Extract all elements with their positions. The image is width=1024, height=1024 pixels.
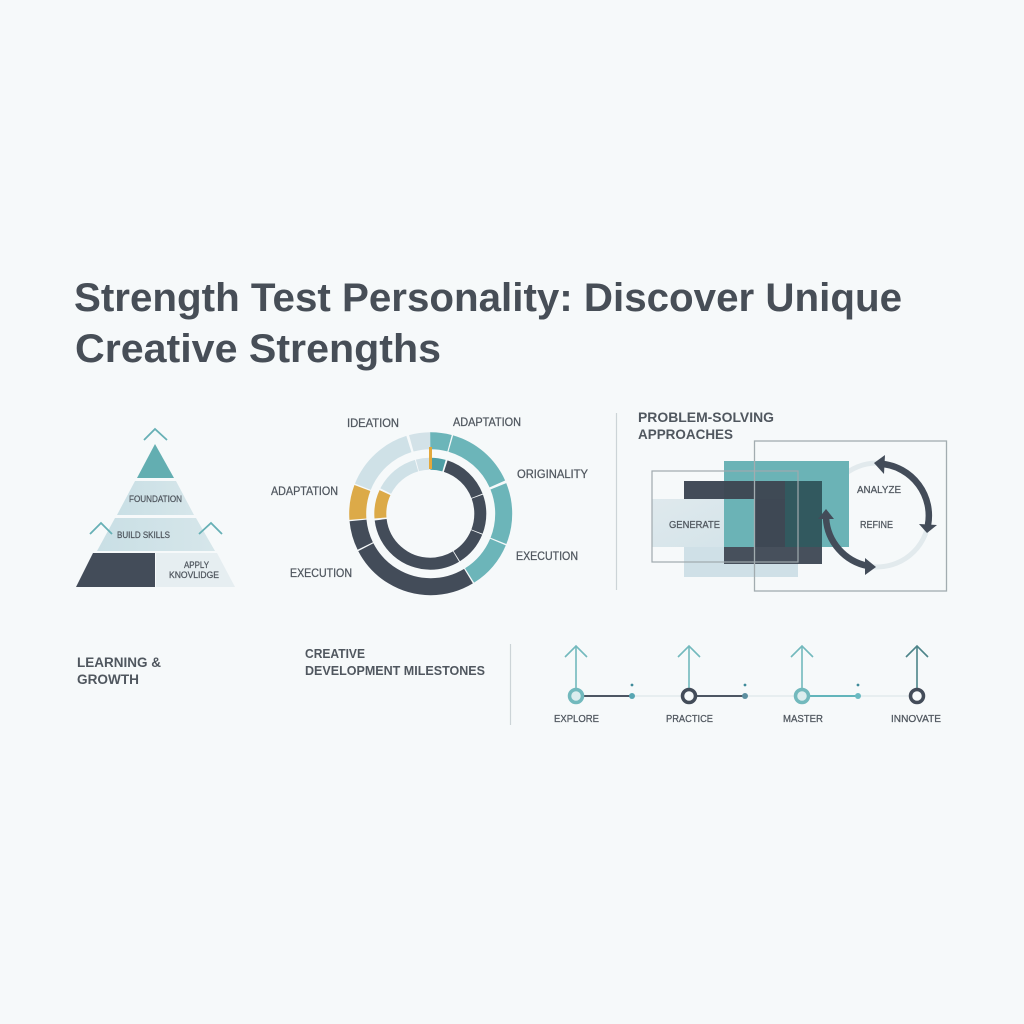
node: explore <box>570 690 582 702</box>
dark overlapping shape <box>684 481 822 564</box>
icon: right chevron <box>199 523 222 534</box>
node: innovate <box>910 690 924 702</box>
title: Creative Strengths <box>75 327 441 371</box>
arrow: innovate <box>906 646 928 689</box>
teal square <box>724 461 849 547</box>
label: explore: EXPLORE <box>554 713 599 725</box>
label: adaptation left: ADAPTATION <box>271 486 338 498</box>
cycle ring <box>825 463 929 567</box>
title <box>74 276 902 371</box>
label: master: MASTER <box>783 713 823 725</box>
label: apply knowledge <box>169 560 219 580</box>
label: apply knowledge: APPLY <box>184 560 209 570</box>
label: foundation: FOUNDATION <box>129 494 182 504</box>
label: execution left: EXECUTION <box>290 568 352 580</box>
label: practice: PRACTICE <box>666 713 713 725</box>
label: generate: GENERATE <box>669 519 720 531</box>
panel: problem-solving diagram <box>652 441 946 591</box>
arrow: master <box>791 646 813 689</box>
title: Strength Test Personality: Discover Unique <box>74 276 902 320</box>
pyramid tier: build skills <box>97 518 215 551</box>
heading: problem-solving approaches: APPROACHES <box>638 426 733 442</box>
panel: donut chart <box>271 417 588 587</box>
heading: problem-solving approaches: PROBLEM-SOLVING <box>638 409 774 425</box>
gold tick <box>429 447 432 469</box>
heading: creative development milestones <box>305 646 485 678</box>
heading: creative development milestones: CREATIVE <box>305 646 365 661</box>
label: analyze: ANALYZE <box>857 484 901 496</box>
heading: learning and growth: GROWTH <box>77 672 139 687</box>
outer ring <box>358 441 504 587</box>
outlined frame: right <box>754 441 946 591</box>
arrow: practice <box>678 646 700 689</box>
label: adaptation top: ADAPTATION <box>453 417 521 429</box>
divider <box>510 644 512 725</box>
label: execution right: EXECUTION <box>516 551 578 563</box>
arrow: refine to generate <box>818 509 876 575</box>
panel: learning pyramid <box>76 429 235 587</box>
heading: learning and growth <box>77 655 161 687</box>
divider <box>616 413 618 590</box>
arrow: explore <box>565 646 587 689</box>
pyramid tier: apply knowledge right <box>156 553 235 587</box>
connector dots <box>629 684 861 699</box>
timeline base line <box>576 695 917 697</box>
timeline segments <box>576 695 858 697</box>
heading: learning and growth: LEARNING & <box>77 655 161 670</box>
label: refine: REFINE <box>860 519 893 531</box>
label: ideation: IDEATION <box>347 418 399 430</box>
light blue lower panel <box>684 547 798 577</box>
outlined frame: left <box>652 471 798 562</box>
heading: creative development milestones: DEVELOPMENT MILESTONES <box>305 663 485 678</box>
label: apply knowledge: KNOVLIDGE <box>169 570 219 580</box>
pyramid apex <box>137 444 174 478</box>
label: innovate: INNOVATE <box>891 713 941 725</box>
label: build skills: BUILD SKILLS <box>117 530 170 540</box>
label: originality: ORIGINALITY <box>517 469 588 481</box>
icon: top chevron <box>144 429 167 440</box>
light generate panel <box>652 499 755 547</box>
heading: problem-solving approaches <box>638 409 774 442</box>
inner ring <box>380 464 480 564</box>
node: practice <box>682 690 696 702</box>
icon: left chevron <box>90 523 112 534</box>
pyramid tier: foundation <box>117 481 194 515</box>
pyramid tier: apply knowledge left <box>76 553 155 587</box>
panel: milestones timeline <box>554 646 941 725</box>
node: master <box>796 690 808 702</box>
arrow: analyze to refine <box>874 455 937 533</box>
